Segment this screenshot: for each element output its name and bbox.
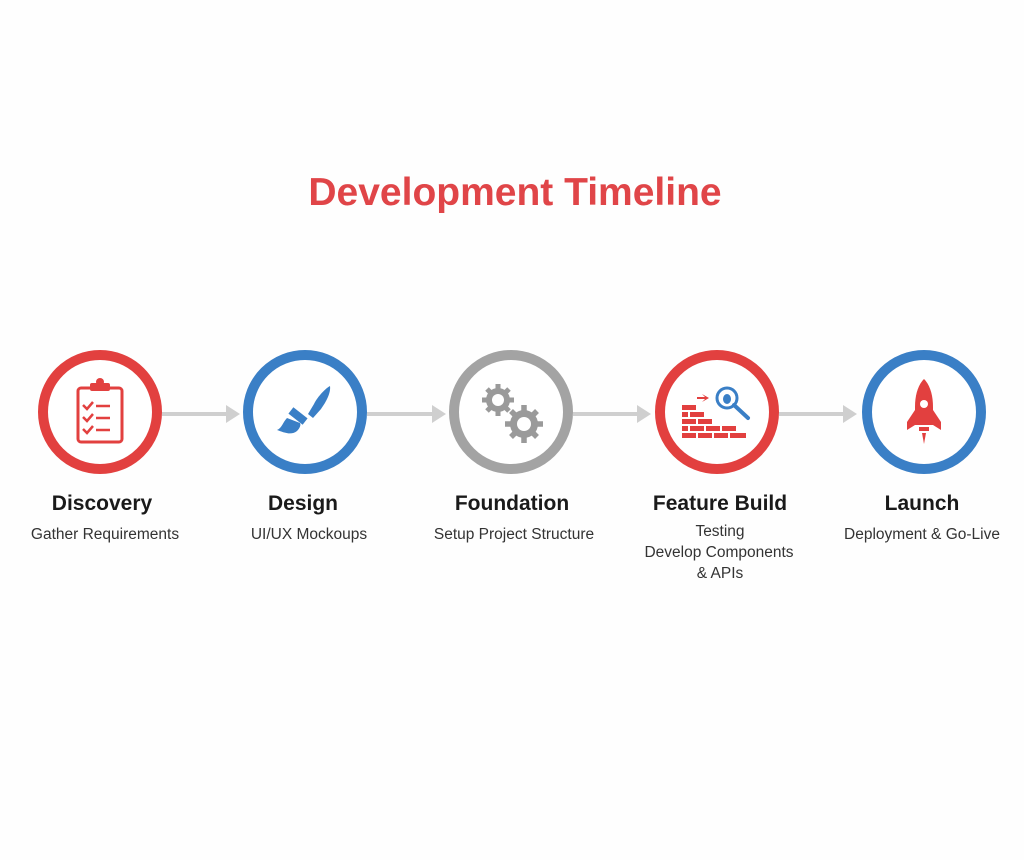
step: feature build: Feature Build: [653, 492, 787, 515]
step: foundation: [434, 355, 594, 543]
title: Development Timeline: [308, 171, 722, 214]
step: foundation: Setup Project Structure: [434, 526, 594, 543]
step: feature build: [644, 355, 794, 582]
step: launch: [844, 355, 1000, 543]
step: discovery: Discovery: [52, 492, 153, 515]
step: discovery: [31, 355, 179, 543]
step: foundation: Foundation: [455, 492, 569, 515]
arrow: discovery to design: [162, 405, 240, 423]
step: design: Design: [268, 492, 338, 515]
arrow: feature build to launch: [779, 405, 857, 423]
arrow: design to foundation: [367, 405, 446, 423]
icon: paintbrush circle: [248, 355, 362, 469]
step: feature build: Develop Components: [644, 544, 794, 561]
step: discovery: Gather Requirements: [31, 526, 179, 543]
step: design: [248, 355, 367, 543]
step: feature build: & APIs: [697, 565, 744, 582]
step: launch: Launch: [885, 492, 959, 515]
icon: clipboard circle: [43, 355, 157, 469]
step: feature build: Testing: [695, 523, 745, 540]
icon: gears circle: [454, 355, 568, 469]
icon: rocket circle: [867, 355, 981, 469]
arrow: foundation to feature build: [573, 405, 651, 423]
step: design: UI/UX Mockoups: [251, 526, 367, 543]
icon: bricks and bug magnifier circle: [660, 355, 774, 469]
step: launch: Deployment & Go-Live: [844, 526, 1000, 543]
